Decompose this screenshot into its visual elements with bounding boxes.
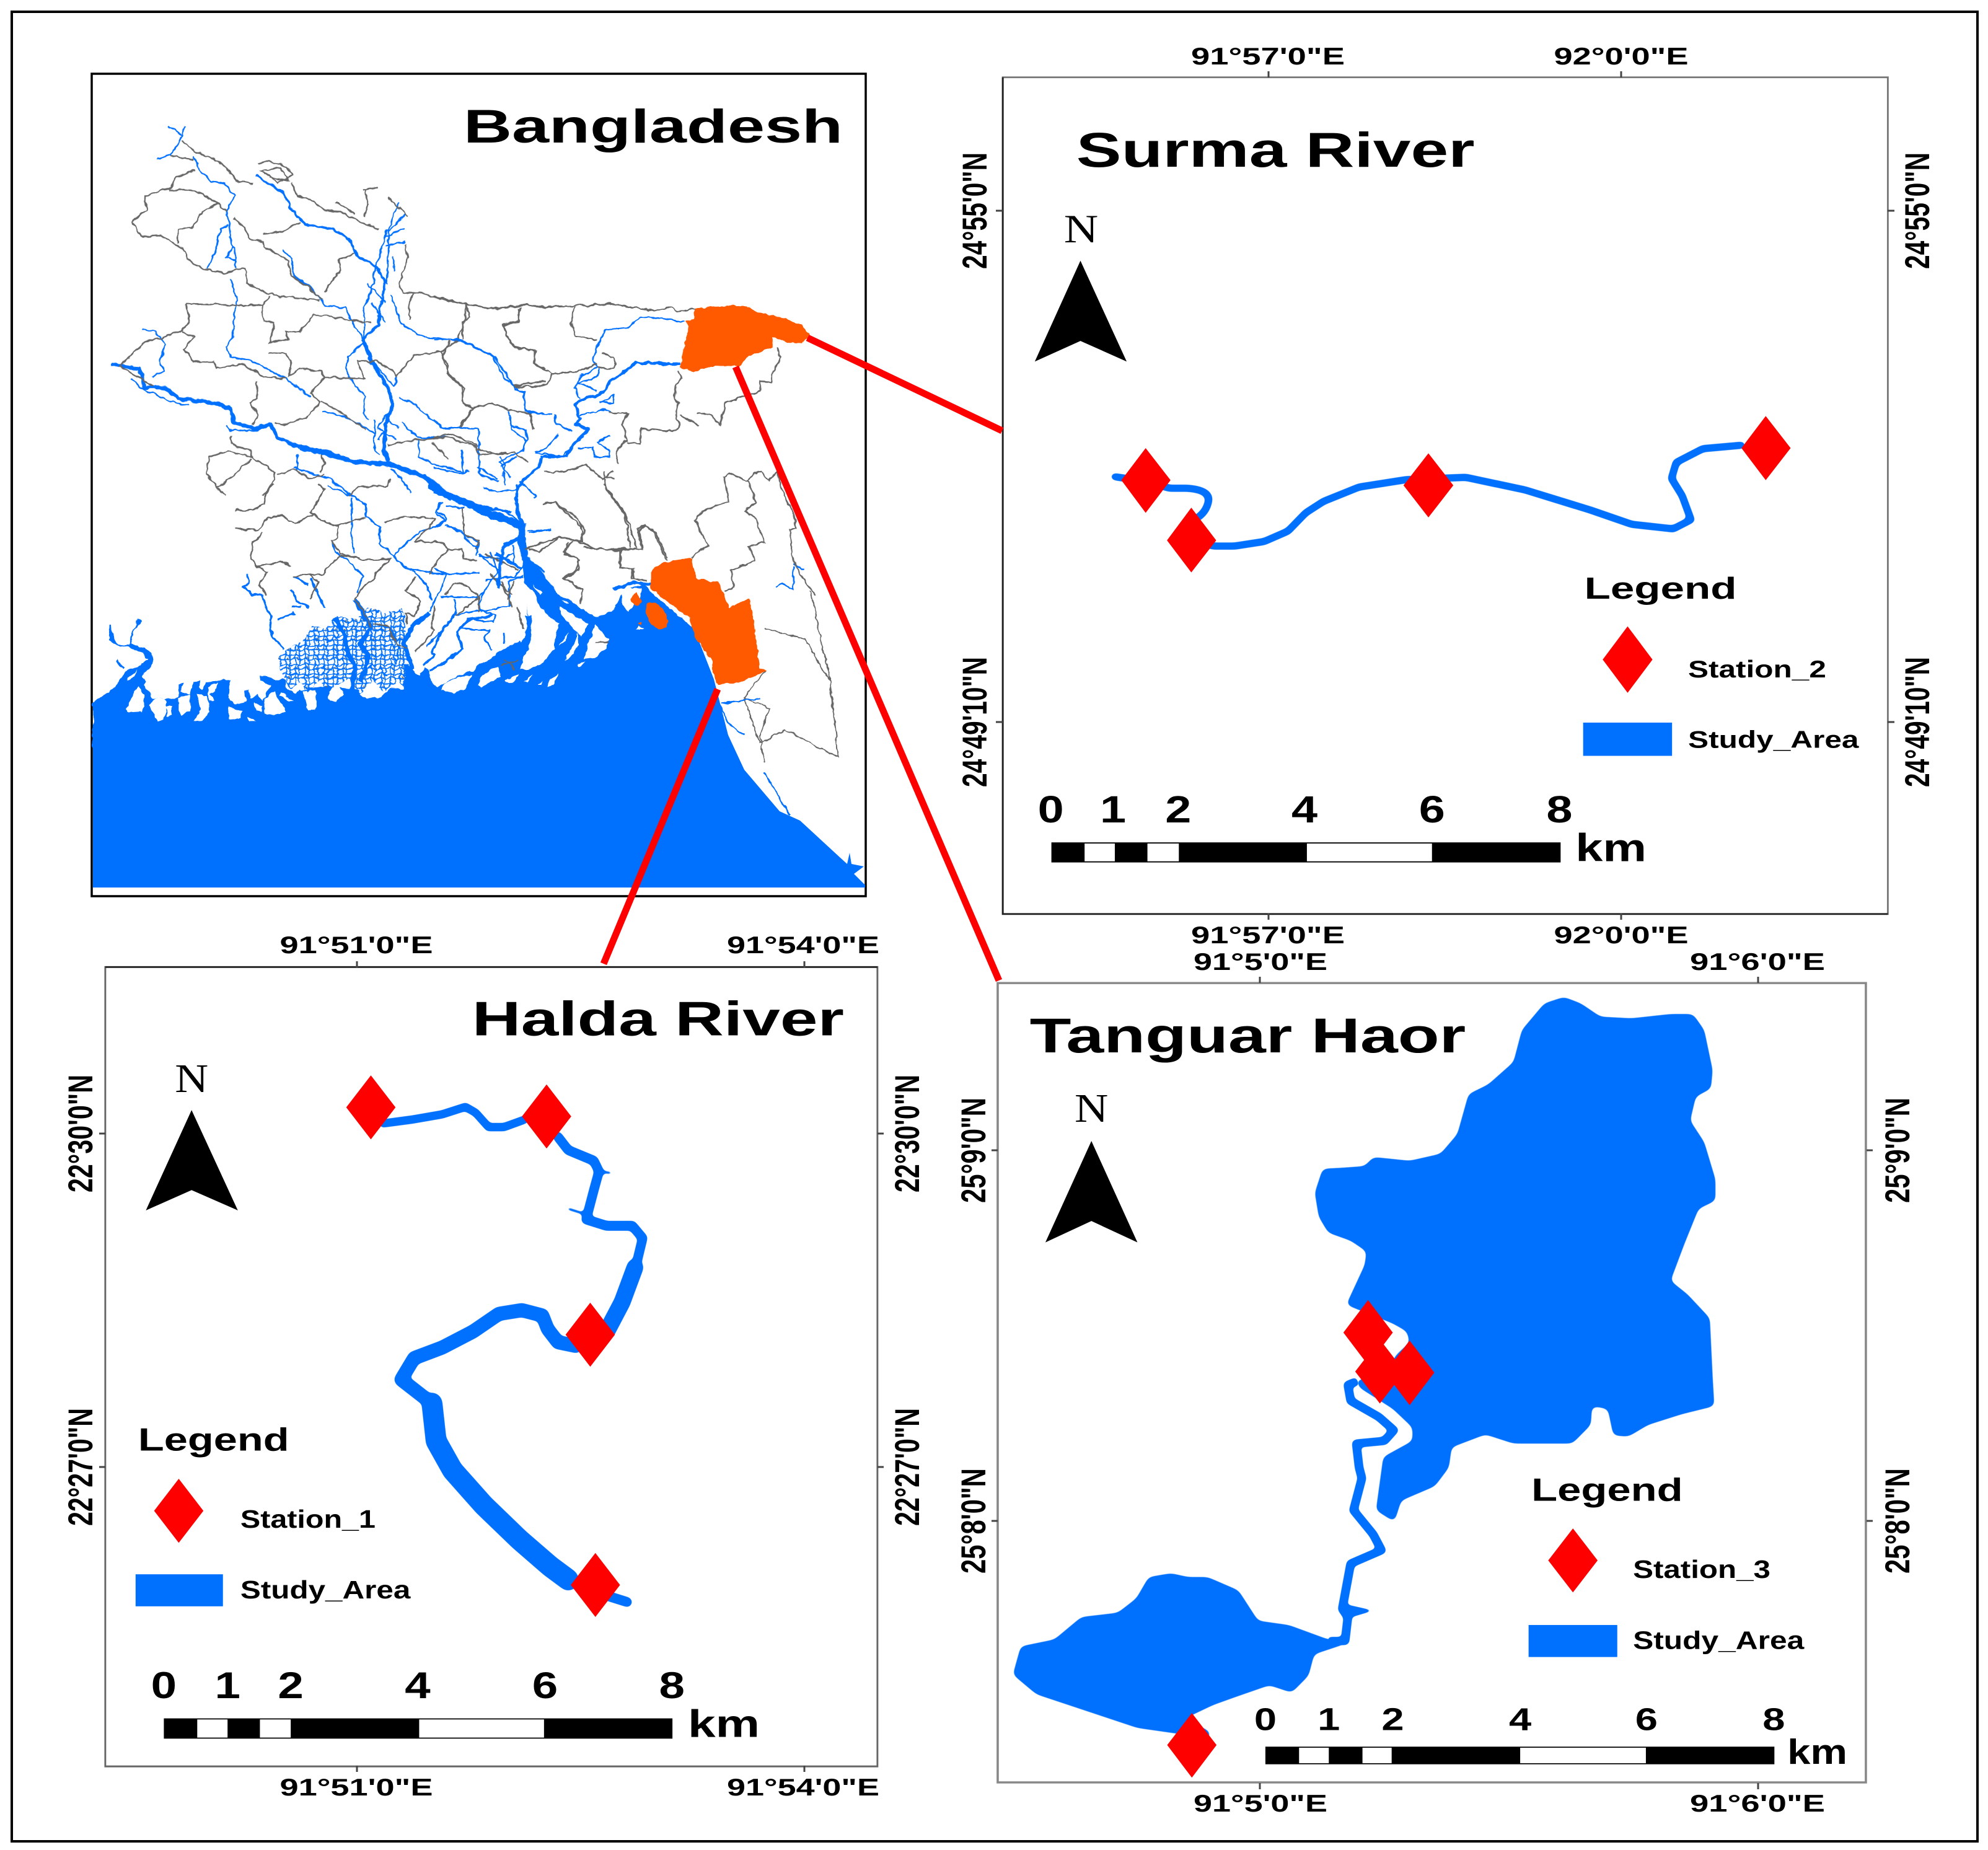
river: [1115, 445, 1741, 546]
connector line: Tanguar Haor: [736, 367, 999, 980]
orange study region: Sylhet: [680, 306, 810, 372]
western coast: [93, 575, 408, 748]
scale bar: 8: [1762, 1702, 1785, 1737]
scale bar: 2: [278, 1664, 304, 1706]
coordinates: Halda River: 91°54'0"E: [727, 932, 879, 959]
connecting channel: [1328, 1381, 1394, 1641]
scale bar: [1038, 789, 1647, 870]
panel: Tanguar Haor: [998, 983, 1866, 1782]
legend: Station_3: [1633, 1555, 1770, 1584]
coordinates: Tanguar Haor: 25°8'0"N: [1878, 1468, 1917, 1574]
scale bar: 6: [1635, 1702, 1658, 1737]
scale bar: km: [1575, 826, 1647, 870]
scale bar: 4: [1509, 1702, 1531, 1737]
legend: Study_Area: [1633, 1626, 1805, 1654]
legend: Station_2: [1688, 656, 1826, 683]
south-east district boundaries: [651, 558, 838, 815]
coordinates: Halda River: 22°27'0"N: [61, 1408, 100, 1526]
coordinates: Halda River: 22°30'0"N: [887, 1075, 926, 1192]
panel title: Halda River: [472, 992, 844, 1046]
orange islands: [630, 593, 672, 632]
coordinates: Tanguar Haor: 91°5'0"E: [1194, 949, 1327, 976]
coordinates: Tanguar Haor: 91°5'0"E: [1194, 1791, 1327, 1817]
coordinates: Halda River: [61, 932, 926, 1801]
connector line: Surma River: [807, 338, 1002, 431]
panel: Surma River: [1003, 77, 1888, 914]
north arrow: N: [1075, 1086, 1108, 1131]
southern delta: [235, 483, 695, 744]
scale bar: 6: [1419, 789, 1445, 831]
scale bar: 0: [1038, 789, 1064, 831]
river network and delta detail: [93, 126, 838, 815]
scale bar: 0: [151, 1664, 177, 1706]
north arrow: N: [1064, 207, 1098, 252]
scale bar: 1: [1317, 1702, 1340, 1737]
coordinates: Surma River: 24°55'0"N: [955, 152, 994, 269]
north arrow: [146, 1056, 238, 1210]
scale bar: 2: [1381, 1702, 1404, 1737]
scale bar: km: [688, 1702, 760, 1745]
scale bar: km: [1787, 1732, 1847, 1771]
map title: Bangladesh: Bangladesh: [464, 100, 843, 153]
legend: Legend: [1531, 1473, 1683, 1508]
scale bar: 1: [1100, 789, 1126, 831]
coordinates: Tanguar Haor: 25°9'0"N: [1878, 1098, 1917, 1203]
coordinates: Tanguar Haor: 91°6'0"E: [1690, 1791, 1825, 1817]
legend: Legend: [138, 1422, 289, 1458]
coordinates: Halda River: 22°27'0"N: [887, 1408, 926, 1526]
station markers: [1121, 416, 1790, 573]
scale bar: 6: [532, 1664, 558, 1706]
coordinates: Tanguar Haor: [954, 949, 1917, 1817]
upper lake: [1315, 997, 1715, 1522]
coordinates: Halda River: 91°54'0"E: [727, 1774, 879, 1801]
scale bar: [1254, 1702, 1847, 1771]
scale bar: 2: [1165, 789, 1191, 831]
coordinates: Halda River: 22°30'0"N: [61, 1075, 100, 1192]
coordinates: Surma River: 24°49'10"N: [1898, 657, 1937, 787]
legend: [1529, 1473, 1805, 1657]
legend: Legend: [1585, 571, 1736, 606]
coordinates: Halda River: 91°51'0"E: [280, 1774, 433, 1801]
coordinates: Surma River: 24°55'0"N: [1898, 152, 1937, 269]
legend: Study_Area: [1688, 726, 1860, 753]
legend: Study_Area: [240, 1576, 411, 1604]
north arrow: [1035, 207, 1127, 361]
scale bar: 4: [1291, 789, 1318, 831]
scale bar: 1: [214, 1664, 240, 1706]
legend: [136, 1422, 411, 1606]
north arrow: N: [175, 1056, 208, 1101]
coordinates: Surma River: 92°0'0"E: [1554, 922, 1688, 949]
connector line: Halda River: [604, 689, 718, 964]
scale bar: 0: [1254, 1702, 1277, 1737]
coordinates: Surma River: 91°57'0"E: [1191, 922, 1345, 949]
eastern river network: [434, 296, 816, 595]
panel: Halda River: [105, 967, 877, 1766]
scale bar: [151, 1664, 760, 1745]
coordinates: Surma River: 92°0'0"E: [1554, 43, 1688, 70]
legend: [1583, 571, 1860, 756]
panel title: Tanguar Haor: [1030, 1008, 1466, 1064]
orange study region: Chattogram: [651, 558, 765, 684]
coordinates: Surma River: 91°57'0"E: [1191, 43, 1345, 70]
coordinates: Tanguar Haor: 91°6'0"E: [1690, 949, 1825, 976]
panel title: Surma River: [1076, 123, 1475, 177]
coordinates: Tanguar Haor: 25°9'0"N: [954, 1098, 993, 1203]
north arrow: [1045, 1086, 1137, 1243]
lower lake: [1013, 1573, 1350, 1742]
northern river network: [112, 126, 545, 496]
coordinates: Tanguar Haor: 25°8'0"N: [954, 1468, 993, 1574]
scale bar: 8: [659, 1664, 685, 1706]
station markers: [346, 1075, 620, 1617]
legend: Station_1: [240, 1506, 376, 1533]
scale bar: 8: [1546, 789, 1572, 831]
coordinates: Surma River: 24°49'10"N: [955, 657, 994, 787]
scale bar: 4: [405, 1664, 431, 1706]
station markers: [1167, 1300, 1435, 1777]
coordinates: Halda River: 91°51'0"E: [280, 932, 433, 959]
panel: Bangladesh map: [92, 74, 866, 896]
sea: [93, 628, 865, 888]
river: [383, 1107, 643, 1602]
coordinates: Surma River: [955, 43, 1937, 949]
